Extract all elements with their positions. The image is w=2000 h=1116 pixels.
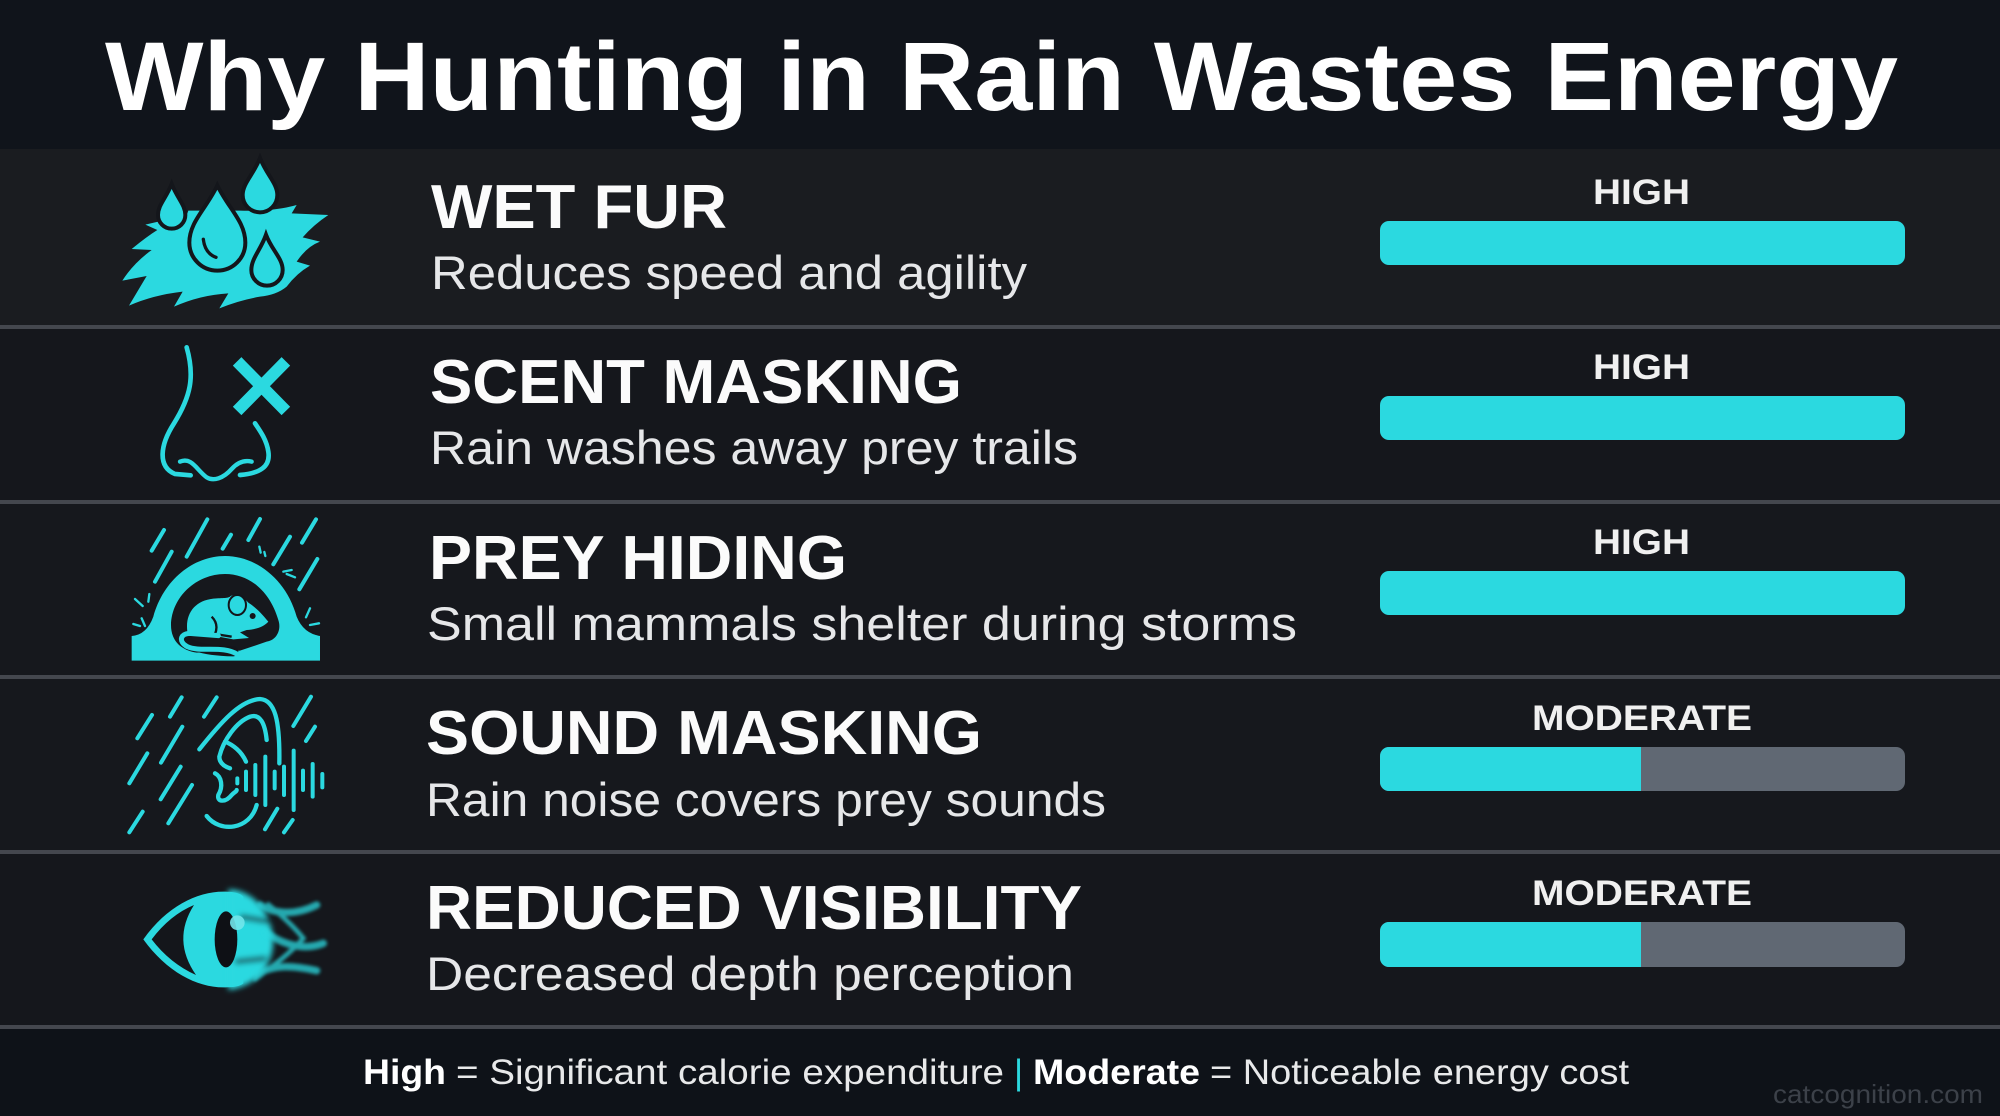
severity label: HIGH xyxy=(1593,523,1690,562)
description: Rain washes away prey trails xyxy=(430,421,1078,474)
footer legend: | xyxy=(1014,1053,1023,1092)
heading: SCENT MASKING xyxy=(430,348,962,417)
footer legend: Moderate xyxy=(1033,1053,1200,1092)
severity label: MODERATE xyxy=(1532,874,1752,913)
footer legend: High xyxy=(363,1053,446,1092)
icon: blurred eye xyxy=(143,889,323,990)
panel: reduced visibility xyxy=(143,874,1905,1000)
title: Why Hunting in Rain Wastes Energy xyxy=(105,22,1898,131)
panel: wet fur xyxy=(122,158,1905,308)
description: Small mammals shelter during storms xyxy=(427,597,1297,650)
footer legend: = Noticeable energy cost xyxy=(1210,1053,1629,1092)
heading: SOUND MASKING xyxy=(426,699,982,768)
severity bar xyxy=(1380,747,1905,791)
severity label: MODERATE xyxy=(1532,699,1752,738)
heading: WET FUR xyxy=(431,173,727,242)
heading: PREY HIDING xyxy=(429,524,847,593)
severity label: HIGH xyxy=(1593,173,1690,212)
watermark: catcognition.com xyxy=(1773,1079,1983,1109)
icon: wet fur with water drops xyxy=(122,158,328,308)
severity bar xyxy=(1380,922,1905,967)
icon: ear in rain with sound wave xyxy=(129,697,322,832)
description: Decreased depth perception xyxy=(426,947,1074,1000)
heading: REDUCED VISIBILITY xyxy=(426,874,1082,943)
footer legend xyxy=(363,1053,1629,1092)
severity label: HIGH xyxy=(1593,348,1690,387)
panel: scent masking xyxy=(163,347,1905,479)
severity bar xyxy=(1380,571,1905,615)
severity bar xyxy=(1380,396,1905,440)
icon: mouse sheltering from rain xyxy=(132,519,320,661)
description: Rain noise covers prey sounds xyxy=(426,773,1106,826)
icon: nose with cross xyxy=(163,347,282,479)
footer legend: = Significant calorie expenditure xyxy=(456,1053,1004,1092)
panel: prey hiding xyxy=(132,519,1905,661)
panel: sound masking xyxy=(129,697,1905,832)
description: Reduces speed and agility xyxy=(431,246,1028,299)
severity bar xyxy=(1380,221,1905,265)
